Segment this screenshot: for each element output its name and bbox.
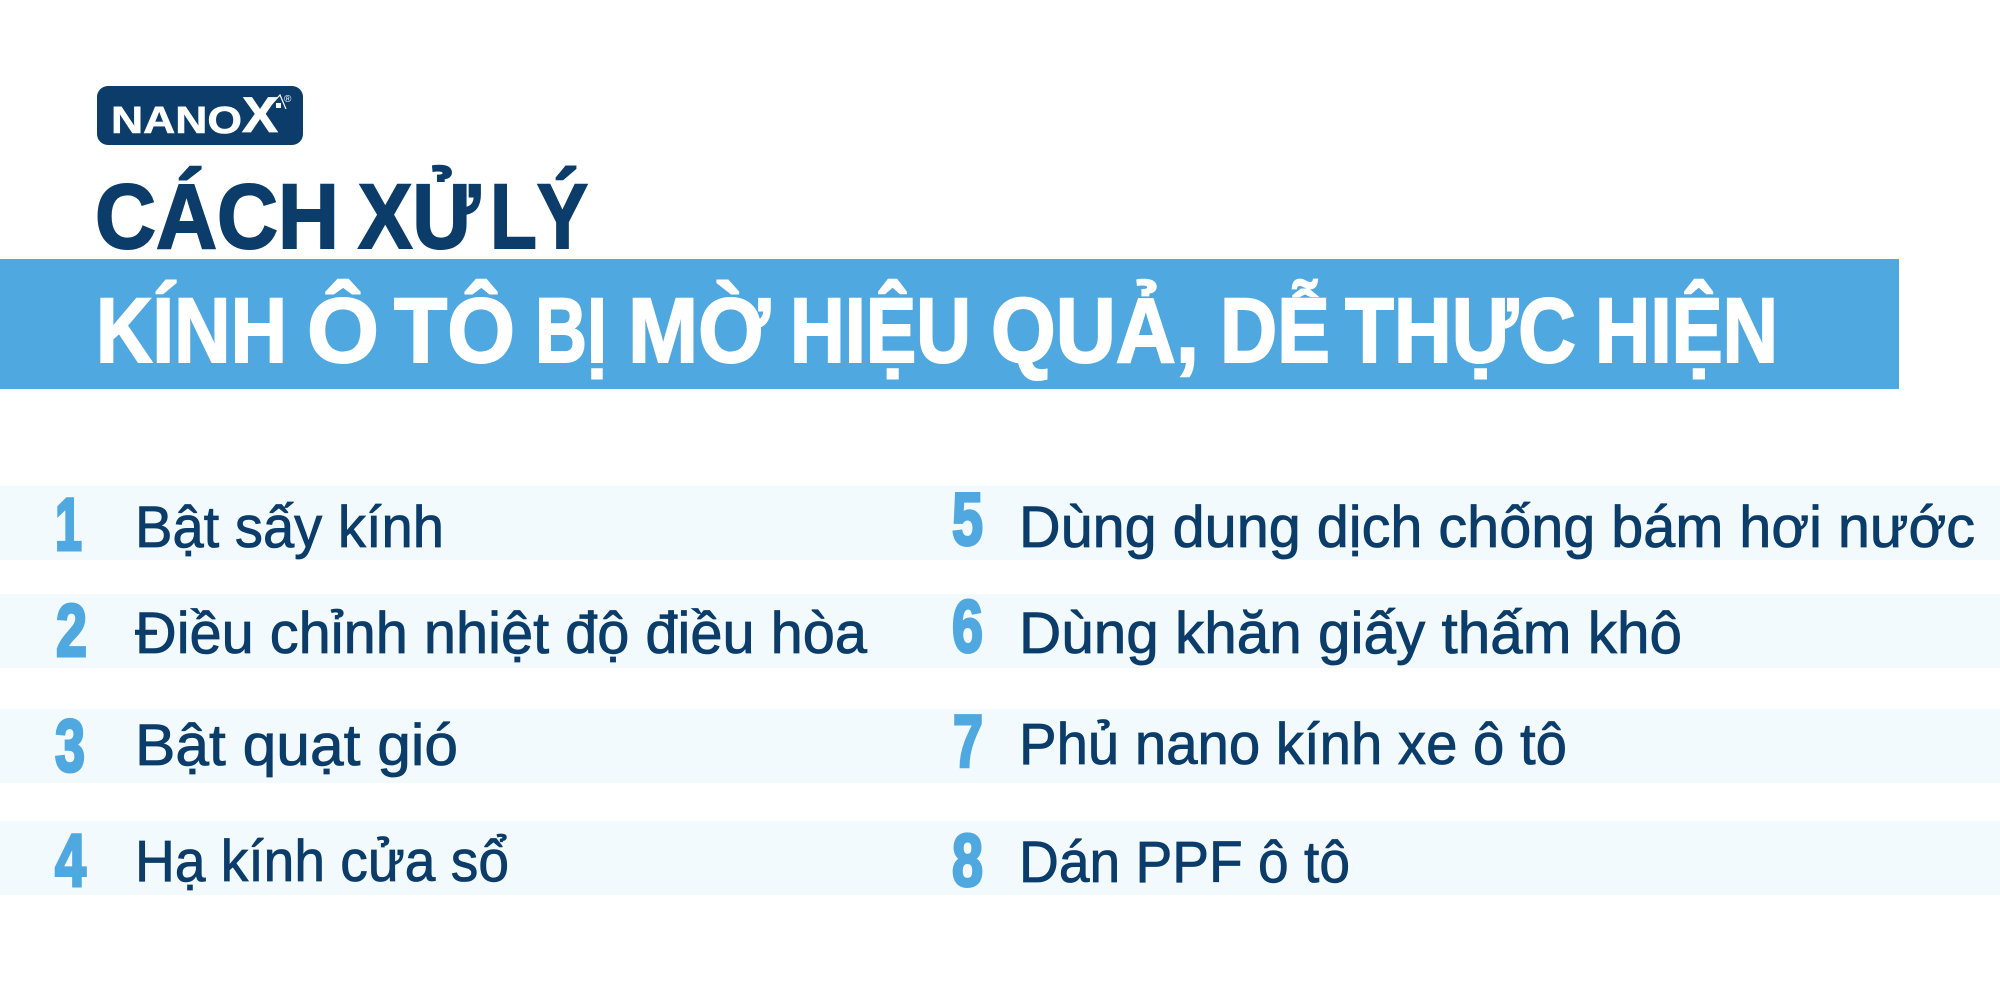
item 8 (952, 819, 1350, 902)
row background 1 (0, 486, 2000, 560)
item 3: Bật quạt gió (135, 713, 458, 778)
logo: NanoX: NANO (111, 100, 242, 142)
item 1: Bật sấy kính (135, 495, 444, 560)
item 8: Dán PPF ô tô (1019, 830, 1350, 895)
title: line 1: LÝ (490, 165, 588, 268)
title banner: HIỆU (790, 279, 971, 382)
title banner: KÍNH (96, 279, 287, 382)
title: line 1 (95, 165, 588, 268)
logo: NanoX: X (242, 87, 278, 143)
item 7: Phủ nano kính xe ô tô (1019, 712, 1567, 777)
title banner: DỄ (1220, 278, 1330, 382)
logo: NanoX: ® (284, 94, 292, 105)
item 1 (55, 483, 444, 566)
title banner: HIỆN (1595, 279, 1778, 382)
item 3 (55, 704, 458, 787)
item 3: 3 (55, 704, 85, 787)
item 7: 7 (953, 700, 983, 783)
title banner: Ô (307, 279, 379, 382)
item 8: 8 (952, 819, 983, 902)
item 6: 6 (952, 585, 983, 668)
item 5: Dùng dung dịch chống bám hơi nước (1019, 495, 1975, 560)
item 1: 1 (55, 483, 82, 566)
item 4 (55, 819, 509, 902)
item 2: 2 (56, 589, 87, 672)
row background 2 (0, 594, 2000, 668)
title: line 1: XỬ (358, 165, 481, 268)
title banner (0, 259, 1899, 389)
title banner: QUẢ, (991, 279, 1199, 382)
item 4: 4 (55, 819, 86, 902)
item 4: Hạ kính cửa sổ (135, 829, 509, 894)
item 6: Dùng khăn giấy thấm khô (1019, 601, 1682, 666)
title banner: MỜ (628, 279, 770, 382)
title banner: BỊ (535, 280, 607, 382)
item 7 (953, 700, 1567, 783)
item 5: 5 (952, 478, 983, 561)
item 2: Điều chỉnh nhiệt độ điều hòa (135, 601, 868, 666)
logo: NanoX (97, 86, 303, 145)
row background 3 (0, 709, 2000, 783)
title banner: TÔ (394, 279, 515, 382)
title: line 1: CÁCH (95, 166, 339, 268)
row background 4 (0, 821, 2000, 895)
title banner: THỰC (1345, 280, 1576, 382)
